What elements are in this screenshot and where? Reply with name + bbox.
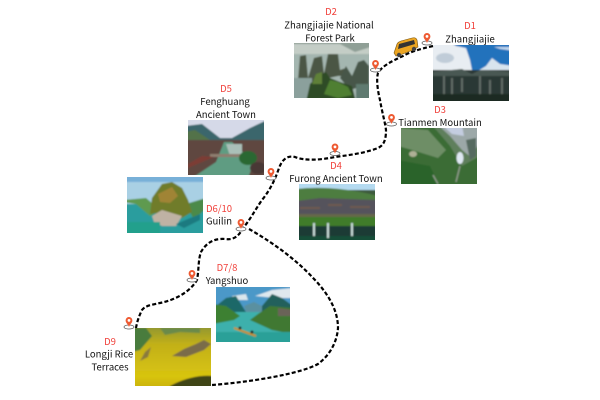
label: D3 Tianmen Mountain <box>398 102 482 129</box>
marker: Guilin pin <box>236 219 246 231</box>
label: D9 Longji Rice Terraces: D9 <box>104 334 116 348</box>
marker: D3 pin <box>386 114 396 126</box>
photo: Furong Ancient Town <box>299 184 375 240</box>
label: D1 Zhangjiajie: D1 <box>464 18 476 32</box>
label: D7/8 Yangshuo: Yangshuo <box>205 273 249 287</box>
photo: Longji Rice Terraces <box>135 328 211 386</box>
label: D6/10 Guilin <box>206 201 232 228</box>
label: D5 Fenghuang Ancient Town <box>196 81 256 121</box>
label: D7/8 Yangshuo <box>205 260 249 287</box>
label: D1 Zhangjiajie: Zhangjiajie <box>445 32 495 46</box>
label: D2 Zhangjiajie National Forest Park: Forest Park <box>305 30 355 44</box>
label: D2 Zhangjiajie National Forest Park <box>284 4 374 44</box>
label: D7/8 Yangshuo: D7/8 <box>217 260 237 274</box>
label: D9 Longji Rice Terraces: Longji Rice <box>85 346 133 360</box>
label: D4 Furong Ancient Town <box>289 158 383 185</box>
route: dashed path Zhangjiajie to Guilin <box>136 46 433 328</box>
label: D5 Fenghuang Ancient Town: Fenghuang <box>200 94 250 108</box>
route: dashed return path Guilin to Longji <box>212 229 338 385</box>
label: D3 Tianmen Mountain: D3 <box>434 102 446 116</box>
marker: Yangshuo pin <box>187 270 197 282</box>
photo: Fenghuang Ancient Town <box>188 120 264 175</box>
label: D6/10 Guilin: D6/10 <box>206 201 232 215</box>
photo: Zhangjiajie <box>433 45 509 101</box>
photo: Tianmen Mountain <box>401 128 477 184</box>
label: D9 Longji Rice Terraces: Terraces <box>91 360 129 374</box>
marker: D5 pin <box>266 168 276 180</box>
label: D5 Fenghuang Ancient Town: Ancient Town <box>196 107 256 121</box>
label: D6/10 Guilin: Guilin <box>206 214 232 228</box>
marker: Longji pin <box>124 317 134 329</box>
marker: D1 pin <box>422 33 432 45</box>
label: D2 Zhangjiajie National Forest Park: D2 <box>325 4 337 18</box>
photo: Yangshuo <box>216 287 290 342</box>
photo: Guilin <box>127 177 203 233</box>
marker: D2 pin <box>370 60 380 72</box>
label: D5 Fenghuang Ancient Town: D5 <box>220 81 232 95</box>
marker: D4 pin <box>330 144 340 156</box>
label: D9 Longji Rice Terraces <box>85 334 133 374</box>
label: D3 Tianmen Mountain: Tianmen Mountain <box>398 115 482 129</box>
label: D4 Furong Ancient Town: Furong Ancient Town <box>289 171 383 185</box>
label: D2 Zhangjiajie National Forest Park: Zhangjiajie National <box>284 18 374 32</box>
icon: yellow van <box>394 38 418 57</box>
photo: Zhangjiajie National Forest Park <box>294 43 369 98</box>
label: D4 Furong Ancient Town: D4 <box>330 158 342 172</box>
label: D1 Zhangjiajie <box>445 18 495 46</box>
